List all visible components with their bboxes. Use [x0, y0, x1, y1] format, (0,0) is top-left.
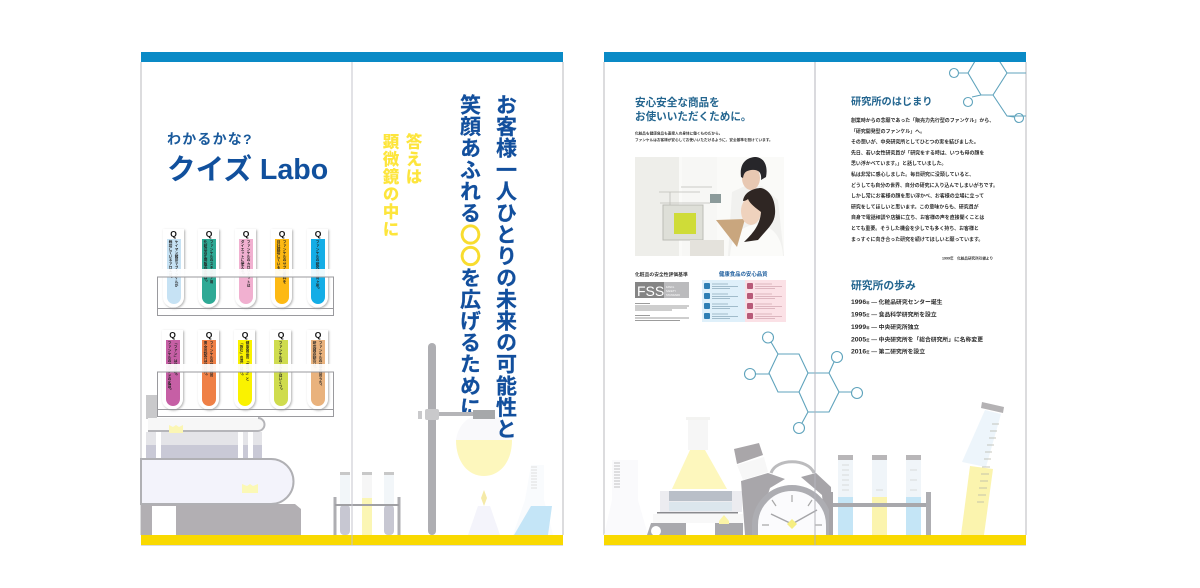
tube 10: Q — [315, 330, 322, 340]
tube 4: 自社栽培している? — [276, 239, 281, 271]
illustration: tilted measuring cylinder — [961, 402, 1004, 535]
answer hint: 答えは — [403, 132, 422, 186]
tube 8: Q — [242, 330, 249, 340]
bottom bar — [604, 535, 1026, 545]
tube 4 — [271, 229, 292, 308]
tube 2: Q — [206, 229, 213, 239]
text: origin story: その想いが、中央研究所としてひとつの実を結びました。 — [851, 139, 979, 146]
tube 6: ファンケルのブランドの名前? — [167, 340, 172, 390]
tube 2: 化粧品の年間販売本数は? — [203, 239, 208, 282]
rack row 1 — [157, 269, 334, 316]
tube 3 — [235, 229, 256, 308]
block: cosmetics safety standard: SAFETY — [666, 289, 676, 293]
main vertical message — [458, 94, 517, 440]
tube 1: Q — [170, 229, 177, 239]
tube 5: Q — [315, 229, 322, 239]
tube 8 — [234, 330, 255, 410]
molecule: centre — [744, 332, 862, 434]
text: origin story: とても重要。そうした機会を少しでも多く持ち、お客様と — [851, 225, 979, 232]
tube 1: 栽培しているアロエは? — [168, 239, 173, 278]
tube 6: Q — [169, 330, 176, 340]
tube 9: Q — [278, 330, 285, 340]
top bar — [604, 52, 1026, 62]
text: origin story — [851, 117, 998, 260]
tube 8: 健康食品の「食べる」と — [245, 340, 250, 381]
illustration: hot plate and base — [647, 491, 743, 536]
text: origin story: 研究をしてほしいと思います。この意味からも、研究員が — [851, 203, 979, 210]
tube 1: ケイマン諸島でファンケルが — [174, 239, 179, 287]
heading: lab history: 研究所の歩み — [851, 278, 916, 292]
tube 9: ファンケルのトクホはいくつ? — [278, 340, 283, 390]
timeline list: 1999年 — 中央研究所独立 — [851, 323, 919, 331]
tube 4: ファンケルのサプリ原料を — [282, 239, 287, 283]
answer hint: 顕微鏡の中に — [380, 133, 399, 238]
tube 4: Q — [279, 229, 286, 239]
tube 3: ダイエットに使える? — [240, 239, 245, 275]
block: cosmetics safety standard: FSS — [637, 283, 664, 299]
main vertical message: 笑顔あふれる 〇〇 を広げるために — [458, 94, 481, 418]
text: origin story: 先日、若い女性研究員が「研究をする時は、いつも母の顔を — [851, 149, 984, 156]
tube 7 — [198, 330, 219, 410]
block: cosmetics safety standard: STANDARD — [666, 293, 680, 297]
tube 10: 研究員の割合は? — [312, 341, 317, 368]
text: origin story: 私は非常に感心しました。毎日研究に没頭していると、 — [851, 171, 974, 178]
tube 6 — [162, 330, 183, 410]
tube 6: 「ファン」は何の略? — [173, 341, 178, 376]
tube 8: 「飲む」の違いは何? — [239, 341, 244, 376]
block: health food quality: 健康食品の安心品質 — [719, 270, 768, 278]
tube 2: ファンケルのスキンケア用 — [209, 239, 214, 284]
tube 5 — [307, 229, 328, 308]
timeline list — [851, 298, 983, 356]
photo: researchers in a lab — [635, 157, 784, 256]
tube 10: ファンケルの従業員のうち、 — [318, 340, 323, 388]
illustration: right test tube rack — [829, 455, 931, 535]
block: cosmetics safety standard — [635, 271, 689, 320]
timeline list: 2016年 — 第二研究所を設立 — [851, 348, 925, 356]
quiz tubes row 1 — [163, 229, 328, 308]
block: health food quality — [702, 270, 786, 322]
tube 9 — [270, 330, 291, 410]
text: origin story: どうしても自分の世界、自分の研究に入り込んでしまいがちです。 — [851, 182, 998, 189]
heading: safety: お使いいただくために。 — [635, 110, 752, 123]
illustration: test tube rack, bottom centre — [335, 472, 399, 535]
heading: origin of the lab: 研究所のはじまり — [851, 95, 932, 108]
block: cosmetics safety standard: 化粧品の安全性評価基準 — [635, 271, 688, 278]
tube 7: Q — [206, 330, 213, 340]
panel: right spread — [604, 51, 1041, 545]
heading: quiz title: クイズ Labo — [167, 153, 328, 186]
timeline list: 2005年 — 中央研究所を「総合研究所」に名称変更 — [851, 336, 983, 344]
tube 1 — [163, 229, 184, 308]
text: origin story: 1999年 化粧品研究所引継より — [942, 256, 993, 260]
tube 2 — [198, 229, 219, 308]
bottom bar — [141, 535, 563, 545]
illustration: books and apparatus, bottom left — [141, 395, 301, 535]
molecule: top right — [949, 62, 1026, 123]
tube 3: Q — [243, 229, 250, 239]
text: origin story: しかし常にお客様の顔を思い浮かべ、お客様の立場に立って — [851, 193, 984, 200]
tube 7: 男女の割合は何対何? — [203, 340, 208, 376]
text: safety intro: ファンケルはお客様が安心してお使いいただけるように、安全基準を設けています。 — [635, 137, 773, 142]
text: origin story: 思い浮かべています。」と話していました。 — [851, 160, 946, 167]
timeline list: 1995年 — 食品科学研究所を設立 — [851, 310, 937, 318]
illustration: alarm clock — [755, 462, 832, 535]
text: origin story: 自身で電話相談や店舗に立ち、お客様の声を直接聞くことは — [851, 214, 984, 221]
main vertical message: お客様一人ひとりの未来の可能性と — [494, 94, 517, 440]
illustration: beaker and flask — [604, 417, 727, 535]
text: origin story: まっすぐに向き合った研究を続けてほしいと願っています。 — [851, 236, 983, 243]
illustration: retort stand — [418, 343, 495, 535]
tube 10 — [307, 330, 328, 410]
panel: left spread — [141, 52, 563, 545]
text: origin story: 創業時からの念願であった「販売力先行型のファンケル」から、 — [851, 117, 994, 124]
text: safety intro — [635, 130, 773, 142]
answer hint — [380, 132, 422, 238]
quiz tubes row 2 — [162, 330, 328, 410]
text: safety intro: 化粧品も健康食品も直接人の身体に働くものだから。 — [635, 130, 722, 136]
heading: safety — [635, 96, 752, 123]
heading: safety: 安心安全な商品を — [635, 96, 720, 109]
rack row 2 — [157, 364, 334, 417]
block: cosmetics safety standard: FANCL — [666, 285, 675, 289]
heading: quiz kicker: わかるかな? — [167, 131, 253, 147]
top bar — [141, 52, 563, 62]
tube 7: ファンケルの研究員の — [209, 340, 214, 378]
illustration: microscope — [734, 443, 785, 535]
text: origin story: 「研究開発型のファンケル」へ。 — [851, 128, 925, 135]
illustration: flasks — [456, 414, 553, 535]
timeline list: 1996年 — 化粧品研究センター誕生 — [851, 298, 943, 306]
tube 5: ファンケルの研究所は何ヶ所? — [315, 239, 320, 289]
tube 3: ファンケルのカロリミットは — [246, 239, 251, 287]
